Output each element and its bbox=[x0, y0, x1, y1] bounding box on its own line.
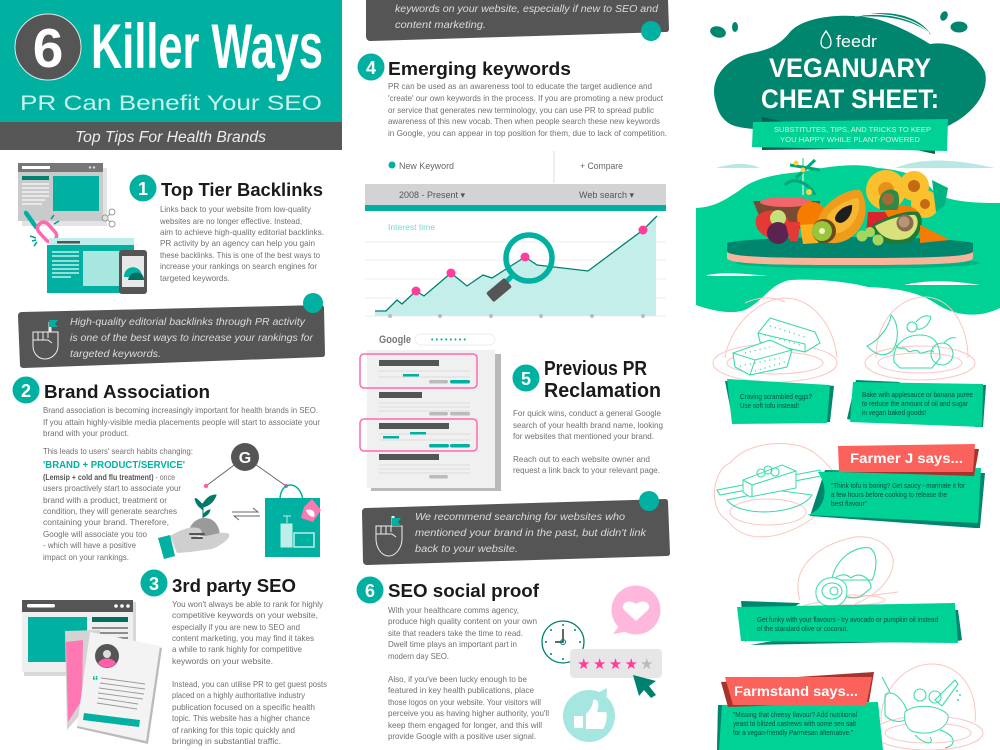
carrot and grapes bbox=[920, 225, 950, 243]
body text: 'create' our own keywords in the process. If you are promoting a new product bbox=[388, 94, 664, 103]
body text: keywords on your website. bbox=[172, 657, 273, 666]
section 1: top tier backlinks: Top Tier Backlinks bbox=[161, 179, 323, 200]
chart: keyword interest over time: Web search ▾ bbox=[579, 190, 634, 200]
banner: subtitle: YOU HAPPY WHILE PLANT-POWERED bbox=[780, 135, 920, 144]
body text: bringing in substantial traffic. bbox=[172, 737, 281, 746]
callout: searching for mentions: We recommend searching for websites who bbox=[415, 511, 625, 523]
body text bbox=[43, 406, 320, 562]
chart: keyword interest over time bbox=[365, 151, 666, 318]
section 5: previous PR reclamation: Reclamation bbox=[544, 380, 661, 402]
section 5: previous PR reclamation: 5 bbox=[521, 369, 531, 389]
icon: pointing hand bbox=[376, 516, 402, 556]
panel: Veganuary header: CHEAT SHEET: bbox=[761, 84, 939, 114]
section 1: top tier backlinks: 1 bbox=[138, 179, 148, 199]
callout: top continuation bbox=[366, 0, 669, 41]
illustration: social proof icons bbox=[542, 586, 662, 742]
body text: Links back to your website from low-quality bbox=[160, 205, 312, 214]
illustration: vegetables in dome bbox=[873, 664, 983, 750]
callout: top continuation: keywords on your website, especially if new to SEO and bbox=[395, 3, 659, 15]
section 4: emerging keywords: 4 bbox=[366, 58, 376, 78]
illustration: avocado bowl bbox=[798, 537, 898, 606]
card: baking tip: to reduce the amount of oil and sugar bbox=[862, 399, 969, 408]
body text: brand with a product, treatment or bbox=[43, 496, 167, 505]
callout: editorial backlinks: targeted keywords. bbox=[70, 348, 161, 360]
body text: targeted keywords. bbox=[160, 274, 230, 283]
body text: aim to achieve high-quality editorial backlinks. bbox=[160, 228, 324, 237]
title: VEGANUARY bbox=[769, 53, 931, 83]
section 2: brand association: 2 bbox=[21, 381, 31, 401]
body text: impact on your rankings. bbox=[43, 553, 129, 562]
section 3: third party SEO: 3 bbox=[149, 574, 159, 594]
body text: especially if you are new to SEO and bbox=[172, 623, 300, 632]
body text: a while to rank highly for competitive bbox=[172, 645, 302, 654]
badge: Farmer J says bbox=[838, 444, 979, 476]
illustration: social proof icons: ★★★★ bbox=[577, 656, 638, 673]
body text: With your healthcare comms agency, bbox=[388, 606, 519, 615]
body text: You won't always be able to rank for highly bbox=[172, 600, 324, 609]
chart: keyword interest over time: + Compare bbox=[580, 161, 623, 171]
illustration: linked web pages bbox=[18, 163, 147, 294]
card: flavour tip bbox=[737, 601, 962, 645]
card: scrambled eggs tip bbox=[725, 379, 834, 424]
body text: site that readers take the time to read. bbox=[388, 629, 523, 638]
plate bbox=[736, 258, 980, 268]
body text: - which will have a positive bbox=[43, 541, 136, 550]
body text: competitive keywords on your website, bbox=[172, 611, 318, 620]
card: Farmer J says: best flavour" bbox=[831, 499, 867, 508]
body text: these backlinks. This is one of the best ways to bbox=[160, 251, 320, 260]
body text: Also, if you've been lucky enough to be bbox=[388, 675, 527, 684]
body text bbox=[513, 409, 663, 475]
card: flavour tip: of the standard olive or coconut. bbox=[757, 624, 848, 633]
callout: editorial backlinks bbox=[18, 293, 325, 368]
icon: number six badge: 6 bbox=[33, 17, 63, 79]
banner: subtitle: SUBSTITUTES, TIPS, AND TRICKS TO KEEP bbox=[774, 125, 931, 134]
section 5: previous PR reclamation bbox=[512, 358, 663, 475]
subtitle: PR Can Benefit Your SEO bbox=[20, 91, 322, 115]
strapline: Top Tips For Health Brands bbox=[75, 129, 266, 146]
callout: editorial backlinks: is one of the best ways to increase your rankings for bbox=[70, 332, 313, 344]
body text: in Google, you can appear in top position for them, due to lack of competition. bbox=[388, 129, 667, 138]
illustration: guest post pages bbox=[22, 600, 162, 744]
body text: those logos on your website. Your visitors will bbox=[388, 698, 541, 707]
body text bbox=[159, 205, 324, 283]
body text: search of your health brand name, looking bbox=[513, 421, 663, 430]
chart: keyword interest over time: 2008 - Present ▾ bbox=[399, 190, 465, 200]
body text: awareness of this new vocab. Then when people search these new keywords bbox=[388, 117, 660, 126]
shape: dark green cloud bbox=[714, 16, 986, 132]
body text: Instead, you can utilise PR to get guest posts bbox=[172, 680, 327, 689]
papaya bbox=[817, 190, 866, 243]
logo: feedr: feedr bbox=[836, 32, 877, 51]
panel: SEO header bbox=[0, 0, 342, 150]
icon: number six badge bbox=[15, 14, 81, 80]
badge: Farmstand says: Farmstand says... bbox=[734, 683, 858, 699]
icon: magnifying glass bbox=[486, 235, 552, 302]
card: baking tip: Bake with applesauce or banana puree bbox=[862, 390, 973, 399]
callout: searching for mentions: mentioned your brand in the past, but didn't link bbox=[415, 527, 647, 539]
section 4: emerging keywords bbox=[358, 54, 667, 138]
body text: Brand association is becoming increasingly important for health brands in SEO. bbox=[43, 406, 318, 415]
illustration: social proof icons: ★ bbox=[640, 656, 653, 673]
section 3: third party SEO: 3rd party SEO bbox=[172, 575, 296, 596]
card: Farmstand says: "Missing that cheesy flavour? Add nutritional bbox=[733, 710, 857, 719]
flowers and plant bbox=[785, 158, 948, 218]
body text: PR activity by an agency can help you gain bbox=[160, 239, 315, 248]
body text: Reach out to each website owner and bbox=[513, 455, 650, 464]
body text: websites are no longer effective. Instead, bbox=[159, 217, 302, 226]
badge: Farmer J says: Farmer J says... bbox=[850, 450, 963, 466]
card: Farmer J says: "Think tofu is boring? Get saucy - marinate it for bbox=[831, 481, 966, 490]
illustration: fruit platter bbox=[696, 158, 1000, 315]
body text: produce high quality content on your own bbox=[388, 617, 537, 626]
body text: topic. This website has a higher chance bbox=[172, 714, 310, 723]
illustration: tofu in dome bbox=[713, 298, 837, 382]
body text: users proactively start to associate your bbox=[43, 484, 181, 493]
body text: For quick wins, conduct a general Google bbox=[513, 409, 661, 418]
section 2: brand association bbox=[12, 376, 320, 562]
body text: PR can be used as an awareness tool to educate the target audience and bbox=[388, 82, 652, 91]
body text: Dwell time plays an important part in bbox=[388, 640, 517, 649]
body text: 'BRAND + PRODUCT/SERVICE' bbox=[43, 460, 185, 471]
body text: (Lemsip + cold and flu treatment) - once bbox=[43, 473, 175, 482]
red pepper and orange bbox=[866, 212, 895, 233]
body text: of ranking for this topic quickly and bbox=[172, 726, 295, 735]
callout: editorial backlinks: High-quality editorial backlinks through PR activity bbox=[70, 316, 306, 328]
body text: publication focused on a specific health bbox=[172, 703, 315, 712]
chart: keyword interest over time: Interest time bbox=[388, 223, 436, 232]
illustration: brand and product link: G bbox=[239, 450, 251, 467]
avocado bbox=[871, 212, 922, 244]
body text: placed on a highly authoritative industry bbox=[172, 691, 306, 700]
illustration: search results page: •••••••• bbox=[431, 337, 467, 344]
body text: for websites that mentioned your brand. bbox=[513, 432, 654, 441]
body text: If you attain highly-visible media placements people will start to associate your bbox=[43, 418, 320, 427]
illustration: dessert in dome bbox=[865, 297, 975, 380]
card: baking tip bbox=[847, 380, 986, 427]
card: scrambled eggs tip: Craving scrambled eggs? bbox=[740, 392, 812, 401]
section 6: SEO social proof: SEO social proof bbox=[388, 580, 540, 601]
body text: featured in key health publications, place bbox=[388, 686, 534, 695]
card: flavour tip: Get funky with your flavours - try avocado or pumpkin oil instead bbox=[757, 615, 938, 624]
body text: brand with your product. bbox=[43, 429, 129, 438]
body text: This leads to users' search habits changing: bbox=[43, 447, 193, 456]
body text: modern day SEO. bbox=[388, 652, 449, 661]
card: baking tip: in vegan baked goods! bbox=[862, 408, 926, 417]
section 6: SEO social proof bbox=[356, 576, 549, 741]
section 1: top tier backlinks bbox=[130, 174, 324, 283]
section 5: previous PR reclamation: Previous PR bbox=[544, 358, 647, 380]
body text: request a link back to your relevant page. bbox=[513, 466, 660, 475]
section 3: third party SEO bbox=[140, 570, 327, 746]
body text: Google will associate you too bbox=[43, 530, 147, 539]
body text: provide Google with a positive user signal. bbox=[388, 732, 536, 741]
chart: keyword interest over time: New Keyword bbox=[399, 161, 454, 171]
card: scrambled eggs tip: Use soft tofu instead! bbox=[740, 401, 799, 410]
body text: perceive you as having higher authority, you'll bbox=[388, 709, 549, 718]
illustration: search results page: Google bbox=[379, 334, 411, 346]
body text: keep them engaged for longer, and this will bbox=[388, 721, 542, 730]
illustration: guest post pages: “ bbox=[92, 673, 98, 688]
card: Farmer J says bbox=[807, 444, 985, 528]
section 4: emerging keywords: Emerging keywords bbox=[388, 58, 571, 79]
card: Farmstand says bbox=[717, 672, 883, 750]
body text: or service that generates new terminology, you can use PR to spread public bbox=[388, 106, 654, 115]
body text bbox=[172, 600, 327, 746]
body text: increase your rankings on search engines for bbox=[160, 262, 317, 271]
panel: Veganuary header bbox=[709, 10, 986, 154]
bowl and apple bbox=[753, 201, 820, 232]
badge: Farmstand says bbox=[721, 672, 874, 707]
icon: pointing hand bbox=[33, 320, 58, 359]
banner: subtitle bbox=[752, 117, 948, 154]
illustration: search results page bbox=[360, 334, 501, 491]
kiwi bbox=[812, 219, 836, 243]
body text: content marketing, you may find it takes bbox=[172, 634, 314, 643]
body text: condition, they will generate searches bbox=[43, 507, 177, 516]
card: Farmer J says: a few hours before cooking to release the bbox=[831, 490, 947, 499]
body text: containing your brand. Therefore, bbox=[43, 518, 169, 527]
illustration: tofu on plate bbox=[715, 444, 832, 537]
callout: searching for mentions: back to your website. bbox=[415, 543, 518, 555]
callout: top continuation: content marketing. bbox=[395, 19, 486, 31]
logo: feedr bbox=[821, 31, 877, 51]
section 2: brand association: Brand Association bbox=[44, 381, 210, 402]
title: Killer Ways bbox=[91, 12, 323, 82]
card: Farmstand says: yeast to blitzed cashews with some sea salt bbox=[733, 719, 856, 728]
section 6: SEO social proof: 6 bbox=[365, 581, 375, 601]
card: Farmstand says: for a vegan-friendly Parmesan alternative." bbox=[733, 728, 853, 737]
shape: green blob bbox=[696, 165, 1000, 315]
callout: searching for mentions bbox=[362, 491, 670, 565]
illustration: brand and product link bbox=[158, 443, 321, 559]
body text bbox=[388, 82, 667, 138]
body text bbox=[388, 606, 549, 741]
